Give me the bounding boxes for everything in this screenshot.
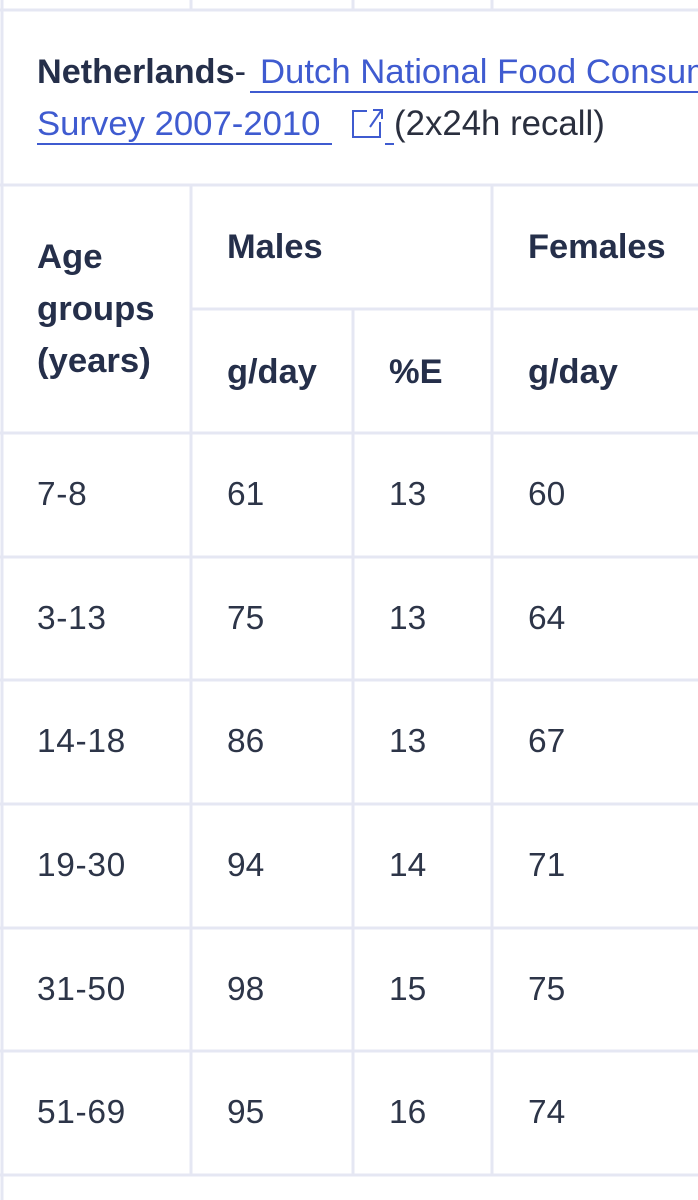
row: ages 3-13: 3-13	[37, 600, 107, 637]
link: Dutch National Food Consumption Survey	[37, 53, 698, 145]
row: ages 31-50: 15	[389, 971, 426, 1008]
link: Dutch National Food Consumption Survey: Survey 2007-2010	[37, 105, 320, 143]
row: ages 14-18: 67	[528, 723, 565, 760]
table header	[37, 228, 666, 391]
row: ages 19-30: 71	[528, 847, 565, 884]
row: ages 31-50: 75	[528, 971, 565, 1008]
icon: external link	[353, 110, 382, 137]
row: ages 7-8: 13	[389, 476, 426, 513]
row: ages 14-18: 14-18	[37, 723, 126, 760]
row: ages 14-18: 13	[389, 723, 426, 760]
row: ages 19-30: 19-30	[37, 847, 126, 884]
row: ages 51-69: 16	[389, 1094, 426, 1131]
header: males g/day: g/day	[227, 353, 317, 391]
row: ages 14-18: 86	[227, 723, 264, 760]
row: ages 51-69: 74	[528, 1094, 565, 1131]
row: ages 51-69: 95	[227, 1094, 264, 1131]
row: ages 3-13: 75	[227, 600, 264, 637]
header: age groups: Age	[37, 238, 103, 276]
row: ages 7-8: 61	[227, 476, 264, 513]
row: ages 3-13: 64	[528, 600, 565, 637]
heading: Netherlands survey title: Netherlands-	[37, 53, 246, 91]
row: ages 51-69: 51-69	[37, 1094, 126, 1131]
row: ages 19-30: 14	[389, 847, 426, 884]
heading: Netherlands survey title	[37, 53, 698, 145]
row: ages 7-8: 60	[528, 476, 565, 513]
table body	[37, 476, 565, 1131]
row: ages 19-30: 94	[227, 847, 264, 884]
recall note: (2x24h recall)	[394, 104, 605, 143]
header: males: Males	[227, 228, 323, 266]
header: age groups: (years)	[37, 342, 151, 380]
header: females g/day: g/day	[528, 353, 618, 391]
row: ages 31-50: 98	[227, 971, 264, 1008]
row: ages 31-50: 31-50	[37, 971, 126, 1008]
row: ages 3-13: 13	[389, 600, 426, 637]
header: age groups: groups	[37, 290, 155, 328]
header: females: Females	[528, 228, 666, 266]
row: ages 7-8: 7-8	[37, 476, 87, 513]
header: males %E: %E	[389, 353, 443, 391]
